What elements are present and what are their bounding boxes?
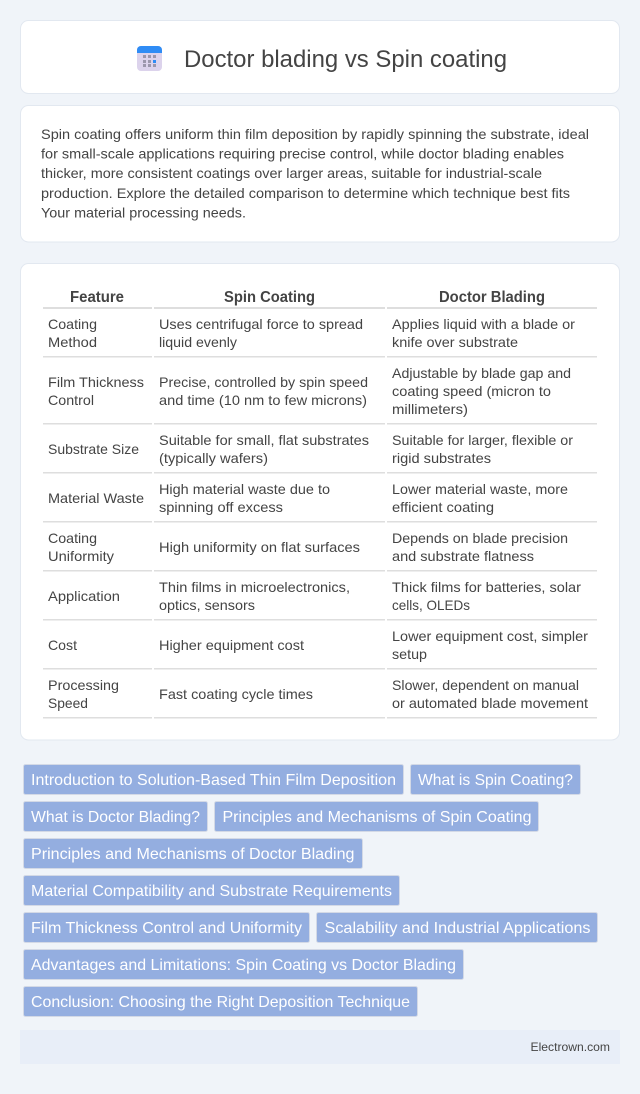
row: material waste: efficient coating [392, 499, 494, 515]
row: processing speed: Slower, dependent on manual [392, 677, 579, 693]
panel: introduction [20, 106, 620, 242]
row: film thickness control: millimeters) [392, 401, 468, 417]
row: application: optics, sensors [159, 597, 255, 613]
row: film thickness control: coating speed (micron to [392, 383, 551, 399]
text block: introduction: for small-scale applications requiring precise control, while doctor blading enables [41, 146, 564, 162]
text block: introduction: Spin coating offers uniform thin film deposition by rapidly spinning the substrate, ideal [41, 126, 589, 142]
table header [70, 289, 545, 306]
icon: calendar [137, 46, 162, 71]
row: film thickness control: Film Thickness [48, 374, 144, 390]
row: substrate size: Suitable for small, flat substrates [159, 432, 369, 448]
row: processing speed: Processing [48, 677, 119, 693]
tag: film thickness control: Film Thickness Control and Uniformity [31, 920, 302, 937]
row: coating method: Coating [48, 316, 97, 332]
row: coating uniformity: Depends on blade precision [392, 530, 568, 546]
tag: introduction: Introduction to Solution-Based Thin Film Deposition [31, 772, 396, 789]
row: coating method: Applies liquid with a blade or [392, 316, 575, 332]
tag: what is doctor blading: What is Doctor Blading? [31, 809, 200, 826]
row: cost [48, 628, 588, 662]
row: application: Application [48, 588, 120, 604]
row: cost: Higher equipment cost [159, 637, 304, 653]
row: substrate size [48, 432, 573, 466]
title: Doctor blading vs Spin coating [184, 46, 507, 73]
row: material waste: High material waste due to [159, 481, 330, 497]
table header: Spin Coating [224, 289, 315, 306]
row: coating method: knife over substrate [392, 334, 518, 350]
tag: material compatibility [24, 876, 400, 906]
row: application: cells, OLEDs [392, 597, 470, 613]
row: coating uniformity: and substrate flatness [392, 548, 534, 564]
row: film thickness control [48, 365, 571, 417]
row: material waste [48, 481, 568, 515]
row: application: Thick films for batteries, solar [392, 579, 581, 595]
row: cost: Cost [48, 637, 77, 653]
tag: principles of doctor blading [24, 838, 362, 868]
tag: material compatibility: Material Compatibility and Substrate Requirements [31, 883, 392, 900]
table header: Doctor Blading [439, 289, 545, 306]
footer: Electrown.com [530, 1040, 610, 1054]
tag: principles of spin coating: Principles and Mechanisms of Spin Coating [222, 809, 532, 826]
row: application: Thin films in microelectronics, [159, 579, 350, 595]
text block: introduction: production. Explore the detailed comparison to determine which technique best fits [41, 185, 570, 201]
row: coating uniformity [48, 530, 568, 564]
row: coating method [48, 316, 575, 350]
panel: topic tags [24, 764, 598, 1016]
tag: scalability [316, 912, 598, 942]
tag: advantages and limitations [24, 950, 464, 980]
row: coating method: Uses centrifugal force to spread [159, 316, 363, 332]
tag: what is spin coating [410, 764, 580, 794]
row: substrate size: Substrate Size [48, 441, 139, 457]
row: processing speed: Fast coating cycle times [159, 686, 313, 702]
row: material waste: Material Waste [48, 490, 144, 506]
row: processing speed: Speed [48, 695, 88, 711]
row: cost: Lower equipment cost, simpler [392, 628, 588, 644]
text block: introduction: thicker, more consistent coatings over larger areas, suitable for industrial-scale [41, 165, 542, 181]
row: coating method: liquid evenly [159, 334, 237, 350]
table header: Feature [70, 289, 124, 306]
tag: what is doctor blading [24, 802, 208, 832]
tag: scalability: Scalability and Industrial Applications [324, 920, 590, 937]
row: material waste: spinning off excess [159, 499, 283, 515]
tag: advantages and limitations: Advantages and Limitations: Spin Coating vs Doctor Blading [31, 957, 456, 974]
tag: principles of doctor blading: Principles and Mechanisms of Doctor Blading [31, 846, 354, 863]
panel: comparison table [20, 264, 620, 740]
row: coating method: Method [48, 334, 97, 350]
footer [20, 1030, 620, 1064]
tag: conclusion: Conclusion: Choosing the Right Deposition Technique [31, 994, 410, 1011]
text block: introduction [41, 126, 589, 220]
row: application [48, 579, 581, 613]
row: processing speed: or automated blade movement [392, 695, 588, 711]
row: substrate size: (typically wafers) [159, 450, 268, 466]
text block: introduction: Your material processing needs. [41, 204, 246, 220]
row: coating uniformity: Uniformity [48, 548, 114, 564]
row: cost: setup [392, 646, 427, 662]
tag: introduction [24, 764, 404, 794]
row: coating uniformity: Coating [48, 530, 97, 546]
row: film thickness control: and time (10 nm to few microns) [159, 392, 367, 408]
tag: conclusion [24, 986, 418, 1016]
tag: film thickness control [24, 912, 310, 942]
row: coating uniformity: High uniformity on flat surfaces [159, 539, 360, 555]
row: material waste: Lower material waste, more [392, 481, 568, 497]
row: processing speed [48, 677, 588, 711]
row: substrate size: rigid substrates [392, 450, 491, 466]
row: film thickness control: Control [48, 392, 94, 408]
tag: principles of spin coating [214, 802, 538, 832]
row: film thickness control: Adjustable by blade gap and [392, 365, 571, 381]
tag: what is spin coating: What is Spin Coating? [418, 772, 573, 789]
row: film thickness control: Precise, controlled by spin speed [159, 374, 368, 390]
row: substrate size: Suitable for larger, flexible or [392, 432, 573, 448]
panel: title card [20, 20, 620, 94]
